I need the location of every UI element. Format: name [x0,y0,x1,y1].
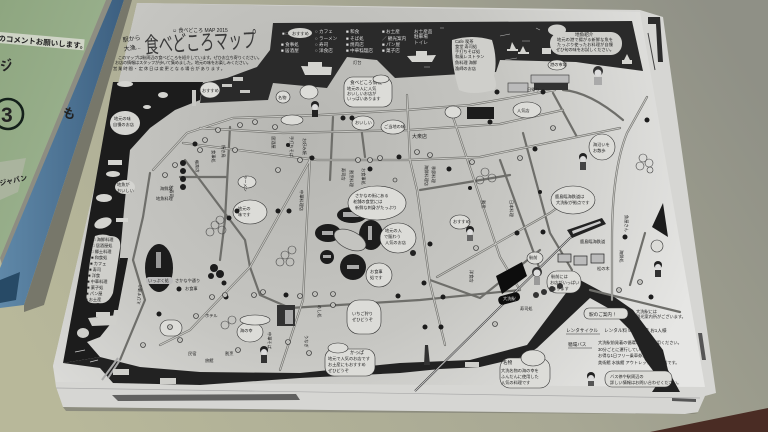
bubble: 地元の [238,205,251,212]
side tagline: 駅から [122,35,141,44]
place labels and shop markers: 割烹 [480,200,487,208]
tall tower mark [424,345,430,365]
bubble [200,82,220,98]
legend on dark band: ■ 食事処 [281,41,299,48]
place labels and shop markers: 手打ちそば [288,136,295,158]
legend on dark band: ■ 和食 [346,28,360,35]
coast labels [113,362,479,384]
blob [359,220,383,250]
right side black triangle [652,203,668,237]
label [116,218,128,222]
note: バス停や駅周辺の [610,373,644,380]
rent a cycle [566,327,667,334]
legend on dark band: ■ パン屋 [382,42,400,48]
intro text: 営業時間・定休日は変更となる場合があります。 [113,65,225,72]
place labels and shop markers: 居酒屋 [270,136,277,149]
place labels and shop markers: 中華料理店 [298,190,305,211]
circled number: 3 [1,104,13,127]
bubble: 駅前 [529,254,537,261]
bubble: station information: 駅のご案内！ [589,311,617,318]
cloud [106,171,120,177]
cyclist [410,250,416,256]
place labels and shop markers: 大衆店 [412,133,427,140]
place labels and shop markers: お好み焼 [301,138,308,156]
bubble [589,134,615,160]
girl center [466,226,474,241]
legend cloud: ■ パン屋 [86,291,102,297]
badge [77,328,89,338]
place labels and shop markers: 民宿 [188,350,196,357]
bubble: 処です [370,274,383,281]
shop row near station [558,254,604,265]
place labels and shop markers: ホテル [205,313,218,319]
bubble [300,85,318,99]
restaurant list cloud top [452,37,496,93]
main map sheet [53,3,705,387]
tower circle left: いっぷく処 [148,277,170,284]
building [508,75,569,92]
bubble: 新鮮な刺身がたっぷり [355,204,397,211]
restaurant list cloud top: 食堂 寿司処 [455,43,478,50]
green booklet on the left [0,0,132,312]
bubble [110,111,140,135]
bubble: station guide [547,271,581,293]
info text: 大洗駅には [636,308,657,315]
bus: 大洗駅前発着の循環バスをご利用ください。 [598,339,682,346]
bubble: 鹿島臨海鉄道は [555,193,584,200]
label [108,160,122,165]
sea: left strip [63,82,203,363]
legend cloud: ■ お土産 [85,296,101,303]
station: 大洗駅 [503,295,516,302]
place labels and shop markers: 海鮮料理店 [423,165,430,186]
central black blobs: temple grounds [315,207,383,280]
bubble [380,223,416,253]
place labels and shop markers: 松の木 [597,265,610,272]
sticker [0,158,26,200]
legend cloud: □ 海鮮料理 [93,236,114,243]
legend cloud: ■ 菓子処 [87,284,104,291]
blob [337,207,367,223]
bus: 30分ごとに運行しています。 [598,346,652,353]
blob [320,250,334,264]
roads [120,90,680,370]
pine trees by harbour [533,283,563,298]
ferry [407,51,436,62]
girl by station [532,267,542,285]
blob [315,224,341,242]
place labels and shop markers: 鹿島臨海鉄道 [580,238,606,245]
logo line: ☺ 食べどころ MAP 2015 [172,27,228,34]
bubble: 海の幸 [240,327,253,334]
bubble: 人気のお店 [385,239,406,246]
restaurant list cloud top: 漁師のお店 [455,65,476,72]
table corner: wood edge [650,408,768,432]
rent a cycle: レンタサイクル [566,327,598,334]
bubble: で賑わう [384,233,401,240]
bubble: おすすめ [453,218,470,225]
main title: 食べどころマップ [144,27,257,58]
boy right [654,261,662,277]
legend on dark band: ○ 寿司 [315,41,329,47]
white sea text bits [75,350,98,362]
legend cloud: □ 郷土料理 [91,248,112,255]
place labels and shop markers: 地魚料理 [156,195,174,202]
place labels and shop markers: 洋食店 [468,270,475,283]
white boat near top [158,92,168,98]
characters [260,66,662,386]
legend on dark band: トイレ [414,40,428,45]
bubble: restaurants near top: いっぱいあります [347,95,381,102]
ship [301,62,332,75]
place labels and shop markers: さかなや通り [175,277,200,284]
bubble [352,116,374,130]
breakwater black bar [112,258,128,310]
bubble [651,240,663,252]
bubbles scattered on map [160,60,663,342]
dark shop block lower left [277,305,295,326]
tower circle left [145,244,173,292]
intro text [113,54,262,72]
mountain area label: 灯台 [353,59,361,66]
restaurant list cloud top: 手打ちそば処 [455,48,481,55]
legend cloud: ■ 中華料理 [87,278,108,285]
note: 詳しい情報はお問い合わせください。 [610,379,681,386]
bubble: お食事 [370,268,383,275]
top-left cloud [117,81,133,87]
legend cloud: ■ カフェ [90,261,106,267]
note: ice cream bottom: お土産にもおすすめ [328,361,366,368]
bubble [445,106,461,118]
info bubble top right [548,24,622,55]
dark name strip [534,83,568,90]
legend on dark band: ○ 洋食店 [315,47,333,54]
legend on dark band: お土産品 [414,28,433,35]
bubble: 老舗の食堂には [353,198,382,205]
boy bottom [260,346,268,363]
fish [93,215,113,231]
label strip: のコメントお願いします。 [0,34,88,51]
legend on dark band: ■ そば処 [346,35,364,42]
bubble: おすすめ [202,87,219,94]
place labels and shop markers: 焼き鳥 [220,145,227,158]
bubble: restaurants near top: 食べどころ情報 [350,79,382,86]
bubble: restaurants near top [344,75,392,107]
station [496,262,527,306]
place labels and shop markers: 季節料理 [430,166,437,184]
legend on dark band: ○ カフェ [315,29,333,35]
place labels and shop markers: 日帰り [527,86,540,93]
train [567,218,606,238]
info bubble top right: 地元の港で揚がる新鮮な魚を [557,36,613,43]
boy [579,153,587,170]
bubble [240,315,270,325]
sailboats [507,42,632,64]
boat [88,312,118,326]
place labels and shop markers: 中華そば [266,332,273,350]
bubble: 港の市場 [550,61,568,68]
bubble: お散歩 [593,147,606,154]
bubble [276,91,290,103]
blob [340,254,366,280]
bubble: restaurants near top: 地元の人に人気 [347,85,376,92]
bubble: 地元の味 [114,115,132,122]
sea: top band [200,21,643,103]
note: seafood bottom: 大洗名物の海の幸を [501,367,539,374]
transport information [566,308,686,387]
bubble: さかなの街にある [355,192,389,199]
place labels and shop markers [135,86,653,364]
bubble [233,200,267,224]
place labels and shop markers: 寿司店 [340,168,347,181]
bus: 美術館 水族館 アウトレットにも便利です。 [598,359,679,366]
strawberry note bottom middle: ぜひどうぞ [352,316,373,323]
note [605,371,681,387]
legend on dark band: ■ 菓子店 [382,47,400,54]
intro text: お店の情報はスタッフが歩いて集めました。地元の味をお楽しみください。 [115,59,251,66]
palm by coast [102,358,120,380]
info bubble top right: たっぷり使ったお料理が自慢 [557,41,614,48]
note: seafood bottom: 人気の料理です [501,379,530,386]
place labels and shop markers: 旅館 [205,357,213,364]
bubble: おいしい [117,187,134,193]
bubble: 地魚が [117,181,130,188]
black dots cluster [180,160,224,279]
girl top right [593,66,603,85]
note: ice cream bottom: かっぱ [350,349,364,356]
place labels and shop markers: お食事処 [360,168,367,186]
restaurant list cloud top: Cafe 喫茶 [455,38,474,45]
circled number [0,99,23,129]
bubble [238,176,256,188]
bubble [281,115,303,125]
legend on dark band: ／ 観光案内 [382,35,407,42]
place labels and shop markers: 割烹 [225,350,233,357]
place labels and shop markers: ラーメン [242,175,248,192]
boy [311,101,319,117]
place labels and shop markers: お食事 [185,285,198,292]
legend cloud [85,234,120,303]
legend on dark band: ■ お土産 [382,28,400,35]
intro text: このマップは駅周辺の食べどころを紹介しています。ぜひお立ち寄りください。 [118,54,262,61]
bubble: ご当地の味 [384,123,406,130]
bubble [527,252,543,264]
bubble [237,322,263,342]
place labels and shop markers: うなぎ [303,335,310,348]
legend on dark band: 駐車場 [414,33,428,40]
place labels and shop markers: 食事処 [210,150,217,163]
bubble [548,60,568,70]
bubble: おいしい [355,119,372,125]
strawberry note bottom middle: いちご狩り [352,310,373,317]
place labels and shop markers: 日本料理 [508,200,515,218]
bubble: 味です [238,211,251,218]
place labels and shop markers: 喫茶店 [193,160,201,173]
bubble: 海沿いを [593,141,610,148]
bubble: 人気店 [517,107,530,114]
bubble: station guide: お店がいっぱい [550,279,579,286]
info bubble top right: 地魚紹介 [575,31,594,38]
cloud [96,194,112,202]
place labels and shop markers: 海鮮処 [618,250,625,263]
bubble [513,102,541,118]
small waves [360,28,540,67]
legend on dark band: ■ 焼肉店 [346,41,364,48]
legend on dark band: おすすめ [292,30,309,37]
bubble [450,215,470,229]
bubble [348,186,406,220]
bubble: 名物 [278,94,286,101]
note: seafood bottom: ふんだんに使用した [501,373,539,380]
place labels and shop markers: えびす通り [135,284,144,305]
legend cloud: ■ 和食処 [91,254,108,261]
bubble: restaurants near top: おいしいお店が [347,90,377,97]
legend on dark band: ○ ラーメン [315,36,338,42]
boy in note [587,372,595,386]
white bird [143,105,151,109]
place labels and shop markers: お寿司 [169,185,175,198]
place labels and shop markers: 寿司処 [520,305,533,312]
note: seafood bottom [500,350,550,388]
legend cloud: ■ 寿司 [89,266,101,272]
place labels and shop markers: めし処 [316,305,323,318]
garden [331,225,369,255]
bubble [115,180,135,194]
title block [113,27,262,72]
bubble: station information [584,308,628,319]
bus [568,339,682,366]
tree clusters [206,154,653,329]
book spine [0,0,124,308]
green booklet on the left: も [61,104,78,123]
legend on dark band: ■ 居酒屋 [281,47,299,54]
ships on the top band [301,28,632,75]
bubble: 地元の人 [385,227,403,234]
restaurant list cloud top: 和風レストラン [455,53,484,60]
note: ice cream bottom: 地元で人気のお店です [328,355,370,362]
strawberry note bottom middle [347,300,381,334]
restaurant list cloud top: 魚料理 海鮮 [455,59,478,66]
bubble [366,263,392,287]
bubble [160,320,182,336]
bubble [551,186,595,214]
note: ice cream bottom: ぜひどうぞ [328,367,349,374]
legend on dark band: ■ □ [282,31,289,36]
legend on dark band [281,28,433,54]
rent a cycle: レンタル料 500円 1日 お1人様 [604,327,667,334]
note: seafood bottom: 名物 [503,359,513,366]
bubble: station guide: 駅前には [551,273,568,280]
boats and buildings near title [192,77,250,106]
left dark strip items [75,81,168,362]
black shop rect [467,107,494,119]
bubble: station guide: あります [552,286,569,292]
bus: お得な1日フリー乗車券あり [598,352,651,359]
title block: 大漁... [123,43,141,53]
transport information: 観光案内所がございます。 [636,313,686,320]
place labels and shop markers: 海鮮丼 [160,185,173,192]
railway line [415,222,600,391]
legend cloud: ■ 洋食 [88,272,101,279]
note: ice cream bottom [325,343,375,376]
place labels and shop markers: 魚屋さん [623,215,630,232]
info bubble top right: ぜひ旬の味をお試しください。 [556,46,614,53]
legend cloud: □ 居酒屋処 [92,242,113,249]
sea: coast, harbour and right channel [63,280,680,392]
bubble [381,120,406,134]
bus: 循環バス [568,341,587,348]
bubble: 自慢のお店 [113,121,134,128]
legend on dark band: ■ 中華料理店 [346,47,373,54]
green booklet on the left: ジャパン [0,174,28,188]
bubble: 大洗駅が拠点です [556,199,590,206]
place labels and shop markers: 割烹料理 [348,170,355,188]
